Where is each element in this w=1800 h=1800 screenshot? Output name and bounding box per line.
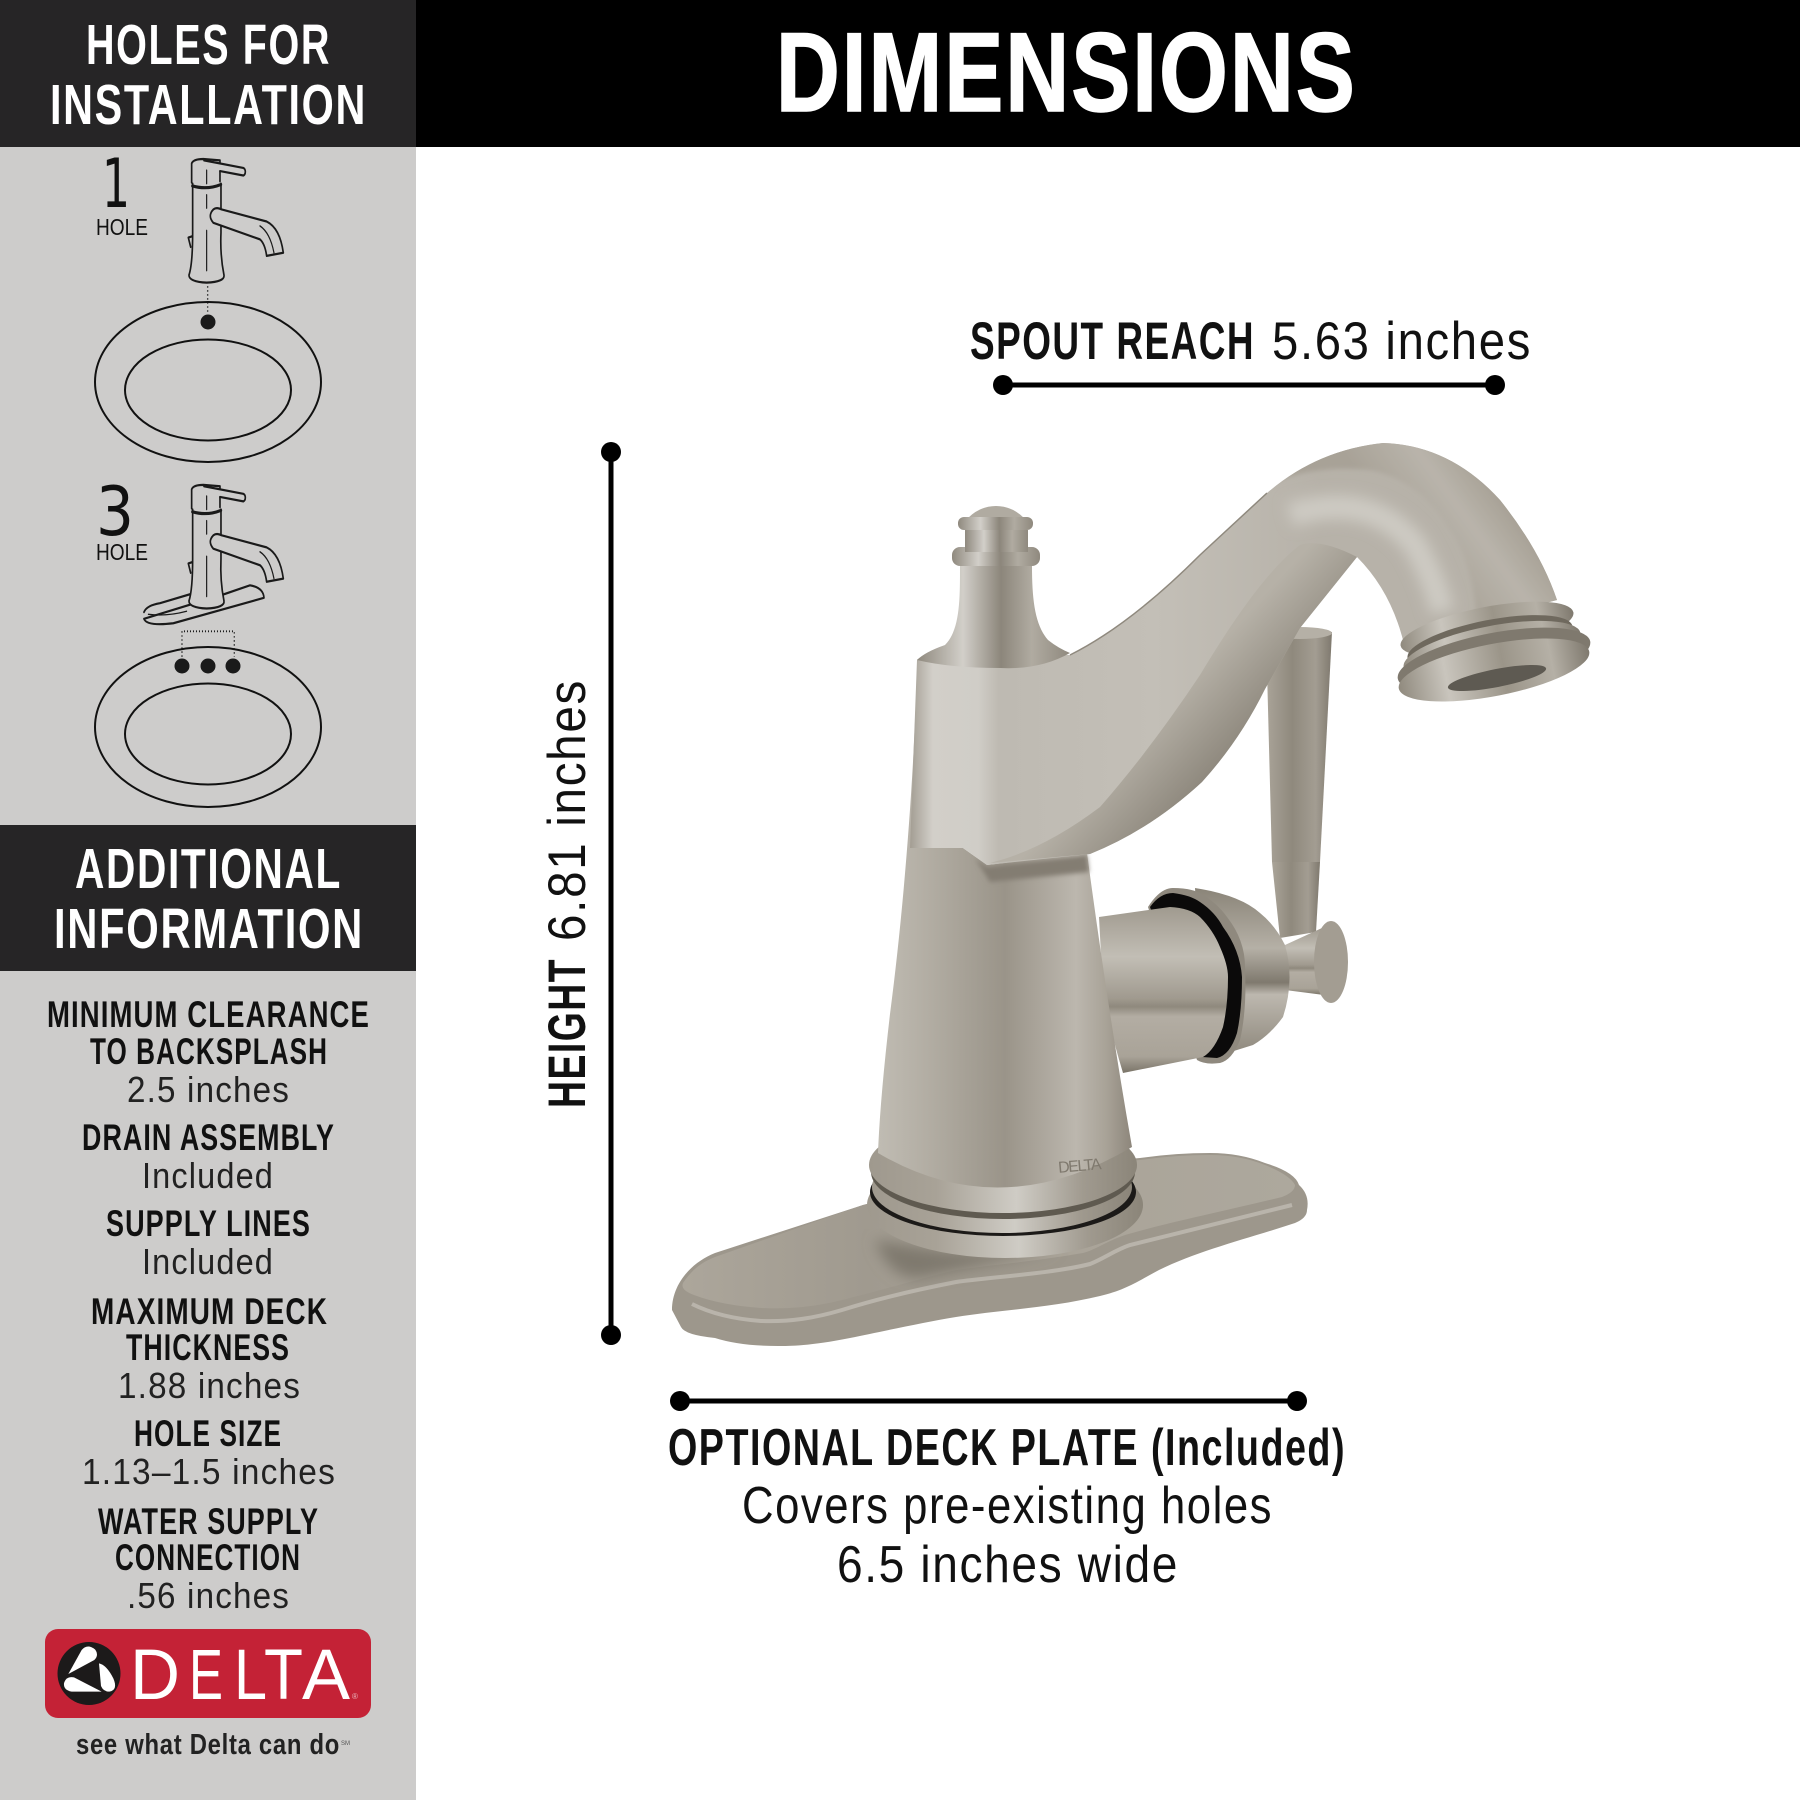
heading: holes for installation: HOLES FOR [86,13,331,77]
spec: water supply connection [98,1501,319,1616]
icon: sink with one hole [95,302,321,462]
tagline: SM [341,1741,350,1747]
dimension: optional deck plate: Covers pre-existing holes [742,1477,1273,1535]
icon: three hole faucet with deck plate [144,485,283,657]
logo: delta: D [130,1636,180,1715]
spec: water supply connection: CONNECTION [115,1537,301,1578]
spec: supply lines: SUPPLY LINES [106,1203,311,1244]
spec: supply lines [106,1203,311,1282]
side cartridge [1099,888,1348,1073]
shadow under spout [975,855,1089,882]
title bar: dimensions [416,0,1800,147]
logo: delta: E [189,1636,223,1715]
text block: specifications list [47,994,370,1616]
heading: additional information: ADDITIONAL [75,837,342,901]
spout top edge [1070,493,1267,655]
spec: water supply connection: .56 inches [127,1575,290,1616]
spec: drain assembly: DRAIN ASSEMBLY [82,1117,335,1158]
label: 1 hole: 1 [102,145,130,224]
spec: minimum clearance: TO BACKSPLASH [90,1031,328,1072]
spec: supply lines: Included [142,1241,274,1282]
illustration: brushed nickel faucet [672,436,1595,1346]
label: 3 hole: HOLE [96,539,148,565]
heading: additional information: INFORMATION [54,897,364,961]
aerator [1393,591,1595,714]
spout underside band [990,543,1357,863]
logo: delta: A [302,1636,351,1715]
spec: hole size: 1.13–1.5 inches [82,1451,336,1492]
icon: delta triangle mark [64,1646,115,1692]
spec: maximum deck thickness: 1.88 inches [118,1365,301,1406]
dimension: spout reach [970,312,1532,395]
spec: hole size: HOLE SIZE [134,1413,282,1454]
spec: minimum clearance [47,994,370,1110]
finial [917,506,1070,668]
label: 1 hole: HOLE [96,214,148,240]
title: DIMENSIONS [776,10,1357,135]
logo: delta [45,1629,371,1718]
label: 3 hole: 3 [96,473,134,552]
logo: delta: T [264,1636,303,1715]
dimension: height [538,442,621,1345]
dimension: height: HEIGHT [538,958,597,1108]
spec: hole size [82,1413,336,1492]
label: 1 hole [96,145,148,240]
logo: delta: L [234,1636,267,1715]
upper body and spout [910,443,1557,865]
logo: delta: ® [352,1692,358,1701]
lower body [878,662,1132,1188]
deck plate [672,1153,1308,1346]
spec: water supply connection: WATER SUPPLY [98,1501,319,1542]
spec: maximum deck thickness: THICKNESS [126,1327,290,1368]
icon: sink with three holes [95,647,321,807]
lever handle [1266,627,1332,938]
tagline: see what Delta can do [76,1729,340,1761]
dimension: optional deck plate [668,1391,1346,1594]
spout highlight [1290,507,1442,612]
dimension: spout reach: SPOUT REACH [970,312,1255,371]
engraved brand: DELTA [1057,1156,1103,1177]
dimension: optional deck plate: 6.5 inches wide [837,1536,1179,1594]
dimension: height: 6.81 inches [538,679,597,941]
heading: additional information [0,825,416,971]
dimension: spout reach: 5.63 inches [1272,312,1532,371]
heading: holes for installation: INSTALLATION [50,73,367,137]
spec: minimum clearance: MINIMUM CLEARANCE [47,994,370,1035]
spec: drain assembly [82,1117,335,1196]
collar flange [867,1117,1143,1258]
spout arch outer side [1284,443,1557,608]
icon: single hole faucet [188,159,283,313]
spec: minimum clearance: 2.5 inches [127,1069,290,1110]
spec: drain assembly: Included [142,1155,274,1196]
dimension: optional deck plate: OPTIONAL DECK PLATE (Included) [668,1419,1346,1477]
spec: maximum deck thickness: MAXIMUM DECK [91,1291,328,1332]
spec: maximum deck thickness [91,1291,328,1406]
left sidebar panel [0,0,416,1800]
spout shading [1284,443,1557,615]
heading: holes for installation [0,0,416,147]
